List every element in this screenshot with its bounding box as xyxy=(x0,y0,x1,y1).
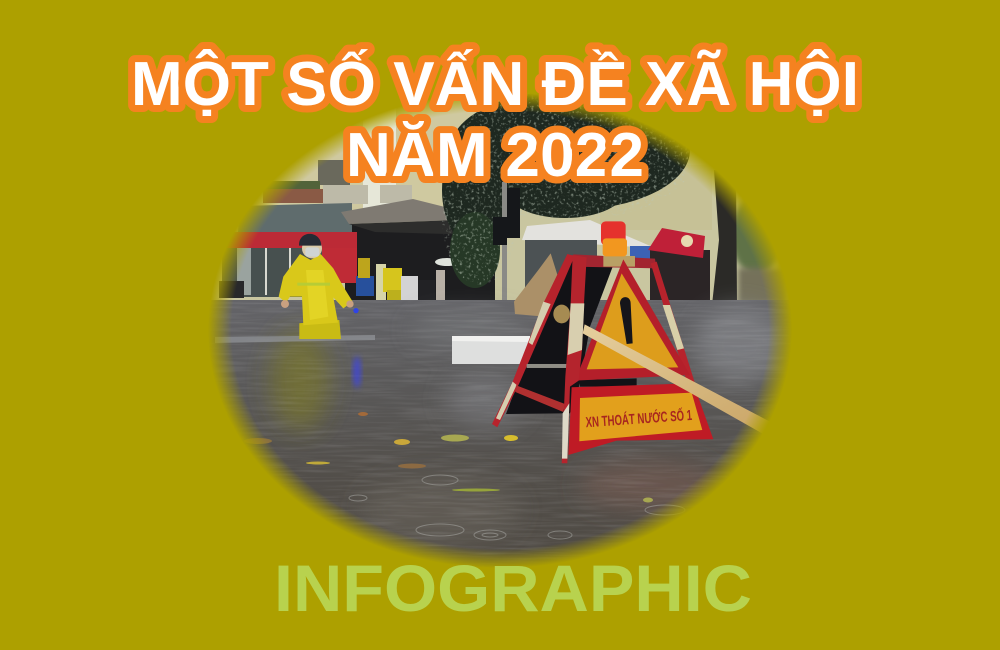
sign back panels xyxy=(506,258,637,414)
broom head xyxy=(514,254,558,316)
stone canopy xyxy=(341,199,453,234)
traffic light pole xyxy=(493,182,520,300)
tree trunk xyxy=(712,170,737,305)
worker ripple xyxy=(215,335,375,343)
left frame edge xyxy=(492,254,575,427)
footer label: INFOGRAPHIC xyxy=(274,551,752,625)
fallen leaves xyxy=(244,412,653,502)
tree canopy xyxy=(442,94,690,288)
oval flood street photo xyxy=(200,85,800,580)
broom handle xyxy=(583,324,770,435)
grey awning xyxy=(238,203,352,232)
triangle warning panel xyxy=(575,259,690,381)
top frame bar xyxy=(573,254,657,268)
orange beacon xyxy=(601,221,627,256)
right frame edge xyxy=(651,262,695,383)
front post xyxy=(562,255,587,463)
title xyxy=(131,50,859,190)
flood water xyxy=(200,300,800,580)
shop behind sign xyxy=(522,220,710,300)
white road barrier xyxy=(452,336,530,364)
right building xyxy=(600,165,712,230)
dark shop entrance xyxy=(345,225,495,300)
red shop front xyxy=(222,232,357,297)
blue light reflection xyxy=(353,356,361,388)
road warning sign and broom xyxy=(492,221,770,463)
rear brace xyxy=(515,385,565,412)
exclamation mark xyxy=(620,297,633,344)
cream corner building xyxy=(263,111,412,208)
motorbikes and people on pavement xyxy=(219,258,452,300)
plate text: XN THOÁT NƯỚC SỐ 1 xyxy=(585,406,693,431)
name plate xyxy=(568,383,713,455)
infographic canvas xyxy=(128,42,862,612)
sky and street backdrop xyxy=(212,151,780,300)
title line 2: NĂM 2022 xyxy=(346,121,644,190)
worker in yellow raincoat xyxy=(279,234,359,339)
title line 1: MỘT SỐ VẤN ĐỀ XÃ HỘI xyxy=(131,50,859,119)
right street greenery xyxy=(736,202,786,300)
